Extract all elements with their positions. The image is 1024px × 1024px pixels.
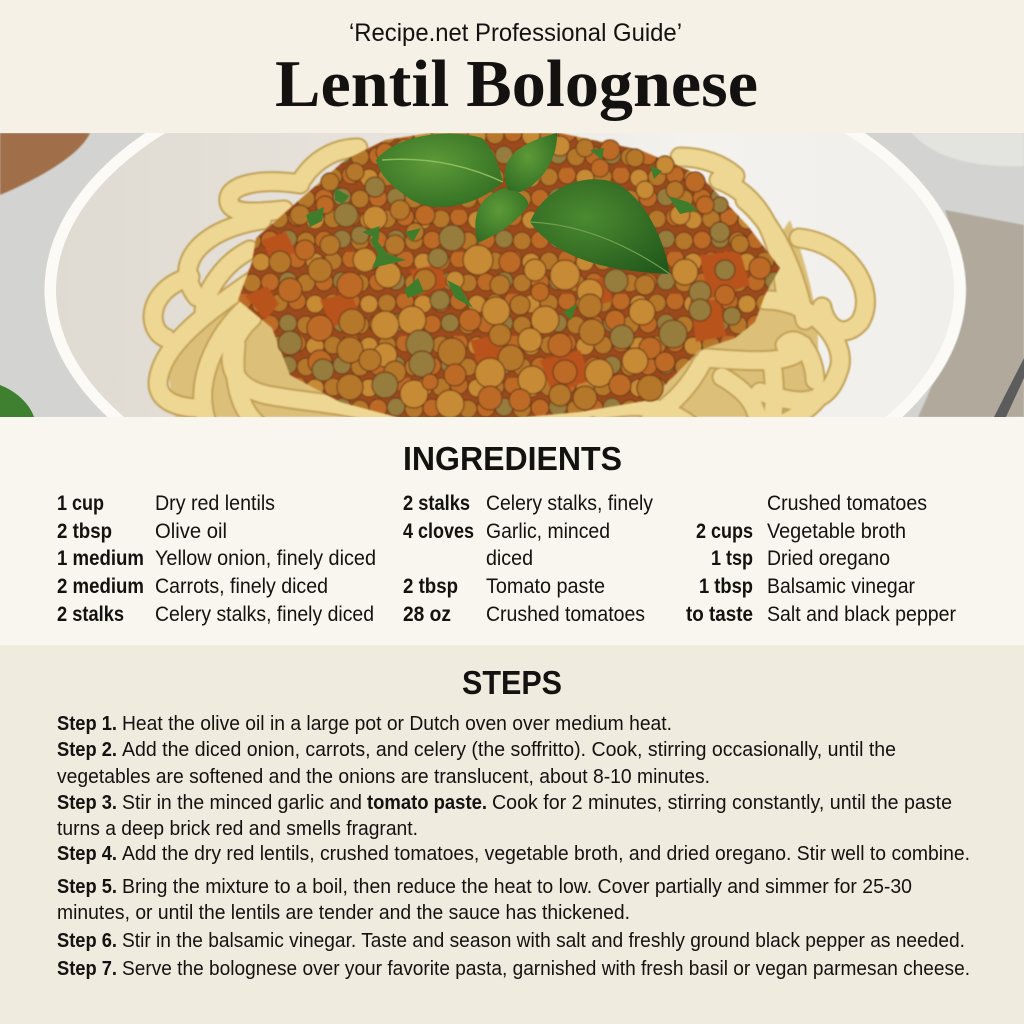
ingredients column 3: Crushed tomatoes	[767, 492, 927, 515]
panel: steps	[0, 645, 1024, 1024]
subtitle: ‘Recipe.net Professional Guide’	[349, 19, 682, 47]
step 2: Step 2.	[57, 739, 117, 761]
ingredients column 2: Tomato paste	[486, 575, 605, 598]
ingredients column 1: Carrots, finely diced	[155, 575, 328, 598]
napkin	[918, 210, 1024, 417]
step 7: Serve the bolognese over your favorite pasta, garnished with fresh basil or vegan parmesan cheese.	[122, 958, 970, 980]
parsley flecks	[306, 148, 698, 320]
step 3: tomato paste.	[367, 792, 487, 814]
ingredients column 1: Dry red lentils	[155, 492, 275, 515]
ingredients column 3: 2 cups	[696, 520, 753, 543]
step 1: Step 1.	[57, 713, 117, 735]
ingredients column 3: to taste	[686, 603, 753, 626]
pasta	[153, 148, 865, 428]
step 3: turns a deep brick red and smells fragrant.	[57, 818, 418, 840]
ingredients column 2	[403, 492, 653, 626]
step 3: Cook for 2 minutes, stirring constantly, until the paste	[492, 792, 952, 814]
header panel	[0, 0, 1024, 133]
ingredients column 1: Yellow onion, finely diced	[155, 547, 376, 570]
ingredients column 2: 2 tbsp	[403, 575, 458, 598]
ingredients column 2: Garlic, minced	[486, 520, 610, 543]
step 5: Bring the mixture to a boil, then reduce the heat to low. Cover partially and simmer for 25-30	[122, 876, 912, 898]
step 5: Step 5.	[57, 876, 117, 898]
ingredients column 1	[57, 492, 376, 626]
grey bowl	[912, 133, 1024, 166]
step 5: minutes, or until the lentils are tender and the sauce has thickened.	[57, 902, 630, 924]
lentil sauce	[238, 133, 780, 424]
ingredients column 1: 2 tbsp	[57, 520, 112, 543]
ingredients column 2: 28 oz	[403, 603, 451, 626]
step 4: Step 4.	[57, 843, 117, 865]
step 6: Step 6.	[57, 930, 117, 952]
step 2: Add the diced onion, carrots, and celery (the soffritto). Cook, stirring occasionally, until the	[122, 739, 896, 761]
ingredients column 1: Celery stalks, finely diced	[155, 603, 374, 626]
ingredients column 3	[686, 492, 956, 626]
wooden bowl	[0, 133, 90, 195]
basil sprig on table	[0, 385, 34, 417]
step 1: Heat the olive oil in a large pot or Dutch oven over medium heat.	[122, 713, 672, 735]
step 3: Stir in the minced garlic and	[122, 792, 362, 814]
ingredients column 2: 2 stalks	[403, 492, 470, 515]
ingredients column 3: Balsamic vinegar	[767, 575, 915, 598]
ingredients column 2: 4 cloves	[403, 520, 474, 543]
ingredients column 1: 2 stalks	[57, 603, 124, 626]
step 4: Add the dry red lentils, crushed tomatoes, vegetable broth, and dried oregano. Stir well to combine.	[122, 843, 970, 865]
plate	[44, 133, 966, 417]
photo: lentil bolognese on pasta	[0, 133, 1024, 417]
ingredients column 3: 1 tsp	[711, 547, 753, 570]
ingredients column 3: Dried oregano	[767, 547, 890, 570]
step 6: Stir in the balsamic vinegar. Taste and season with salt and freshly ground black pepper as needed.	[122, 930, 965, 952]
ingredients column 2: diced	[486, 547, 533, 570]
ingredients column 3: Salt and black pepper	[767, 603, 956, 626]
step 3: Step 3.	[57, 792, 117, 814]
step 5	[57, 876, 912, 924]
ingredients column 2: Celery stalks, finely	[486, 492, 653, 515]
ingredients column 1: 2 medium	[57, 575, 144, 598]
step 7: Step 7.	[57, 958, 117, 980]
ingredients column 2: Crushed tomatoes	[486, 603, 645, 626]
ingredients column 1: Olive oil	[155, 520, 227, 543]
ingredients heading: INGREDIENTS	[403, 440, 622, 477]
ingredients column 1: 1 cup	[57, 492, 104, 515]
fork	[994, 358, 1024, 417]
steps heading: STEPS	[462, 664, 562, 701]
panel: ingredients	[0, 417, 1024, 645]
step 2: vegetables are softened and the onions are translucent, about 8-10 minutes.	[57, 766, 710, 788]
ingredients column 3: 1 tbsp	[699, 575, 753, 598]
ingredients column 1: 1 medium	[57, 547, 144, 570]
step 3	[57, 792, 952, 840]
ingredients column 3: Vegetable broth	[767, 520, 906, 543]
basil leaves	[376, 133, 670, 274]
title: Lentil Bolognese	[275, 47, 758, 121]
step 2	[57, 739, 896, 788]
